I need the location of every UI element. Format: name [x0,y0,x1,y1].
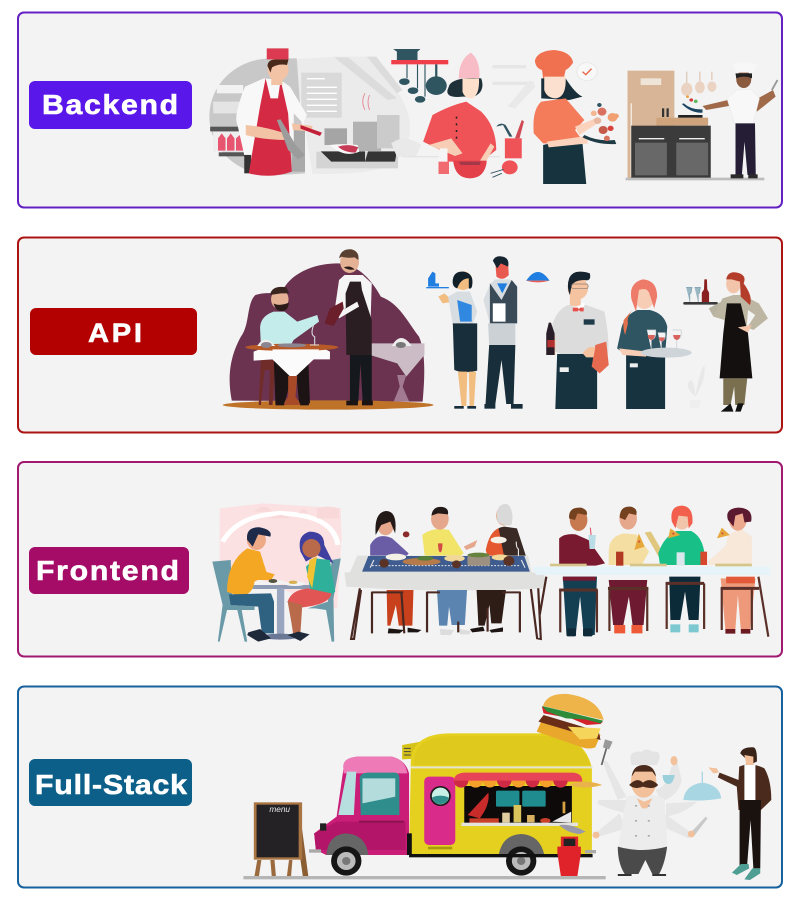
illustration: food truck scene [243,694,771,880]
illustration: friends eating pizza [533,506,770,637]
illustration: food truck [309,733,596,876]
illustration: wine service at table [223,249,434,410]
badge: Backend [29,81,192,129]
badge: API [30,308,197,355]
panel: Frontend [18,462,782,656]
illustration: waitress with bottle tray [683,272,768,412]
badge: Frontend: Frontend [36,556,179,587]
illustration: menu board: menu [269,805,290,814]
illustration: burger [537,694,604,749]
badge: Full-Stack [29,759,192,806]
illustration: multi-armed chef [568,739,721,876]
badge: API: API [88,318,142,348]
panel: Backend [18,12,782,208]
badge: Backend: Backend [42,90,178,121]
illustration: diners [212,503,770,642]
illustration: menu board [254,802,308,876]
illustration: customer [709,747,771,880]
illustration: waitress and waiter in vest [426,256,550,409]
badge: Full-Stack: Full-Stack [35,770,188,801]
illustration: waitress with glasses [617,279,705,409]
illustration: grill chef [209,48,410,176]
illustration: couple at cafe table [212,503,342,642]
illustration: chef at stove [626,62,778,180]
illustration: chef mixing [391,49,524,178]
illustration: chef tossing food [492,50,619,184]
panel: Full-Stack [18,686,782,888]
illustration: waiter with wine bottle [546,272,609,409]
illustration: waiters [223,249,768,412]
illustration: family at long table [344,504,546,639]
illustration: kitchen chefs [209,48,778,184]
badge: Frontend [29,547,189,594]
panel: API [18,238,782,432]
